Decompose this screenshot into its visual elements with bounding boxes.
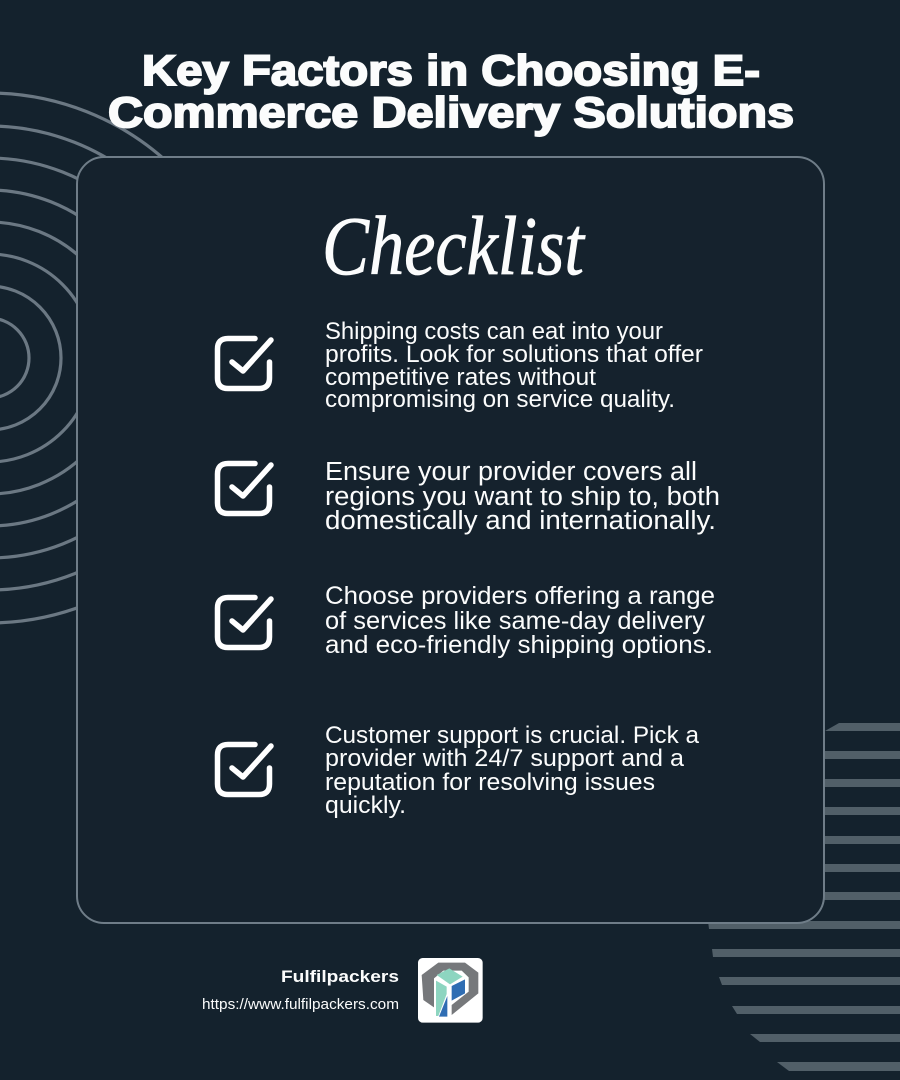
text: services	[325, 582, 715, 659]
icon: checkbox 3	[218, 598, 271, 648]
text: coverage	[325, 458, 720, 535]
text: customer support: provider with 24/7 support and a	[325, 745, 685, 772]
text: shipping costs: competitive rates without	[325, 364, 596, 391]
text: services: of services like same-day delivery	[325, 607, 706, 635]
brand name: Fulfilpackers	[281, 967, 399, 986]
icon: checkbox 2	[218, 464, 271, 514]
text: coverage: regions you want to ship to, both	[325, 483, 720, 511]
text: customer support: Customer support is crucial. Pick a	[325, 722, 700, 749]
text: shipping costs: Shipping costs can eat into your	[325, 318, 663, 345]
website url: https://www.fulfilpackers.com	[202, 997, 399, 1013]
text: shipping costs	[325, 318, 703, 413]
text: customer support	[325, 722, 700, 819]
text: customer support: reputation for resolving issues	[325, 769, 655, 796]
title: Key Factors in Choosing E-	[142, 47, 760, 95]
panel: checklist card	[77, 157, 824, 923]
text: shipping costs: profits. Look for solutions that offer	[325, 341, 703, 368]
text: coverage: domestically and internationally.	[325, 507, 716, 535]
decorative concentric arcs	[0, 93, 254, 623]
title	[108, 47, 794, 137]
icon: checkbox 1	[218, 338, 271, 388]
title: Commerce Delivery Solutions	[108, 89, 794, 137]
text: services: and eco-friendly shipping options.	[325, 631, 713, 659]
heading: Checklist: Checklist	[322, 200, 586, 293]
text: customer support: quickly.	[325, 792, 406, 819]
text: services: Choose providers offering a range	[325, 582, 715, 610]
text: coverage: Ensure your provider covers all	[325, 458, 697, 486]
icon: checkbox 4	[218, 744, 271, 794]
icon: Fulfilpackers logo	[418, 958, 483, 1023]
decorative stripes	[708, 723, 900, 1071]
text: shipping costs: compromising on service quality.	[325, 386, 675, 413]
